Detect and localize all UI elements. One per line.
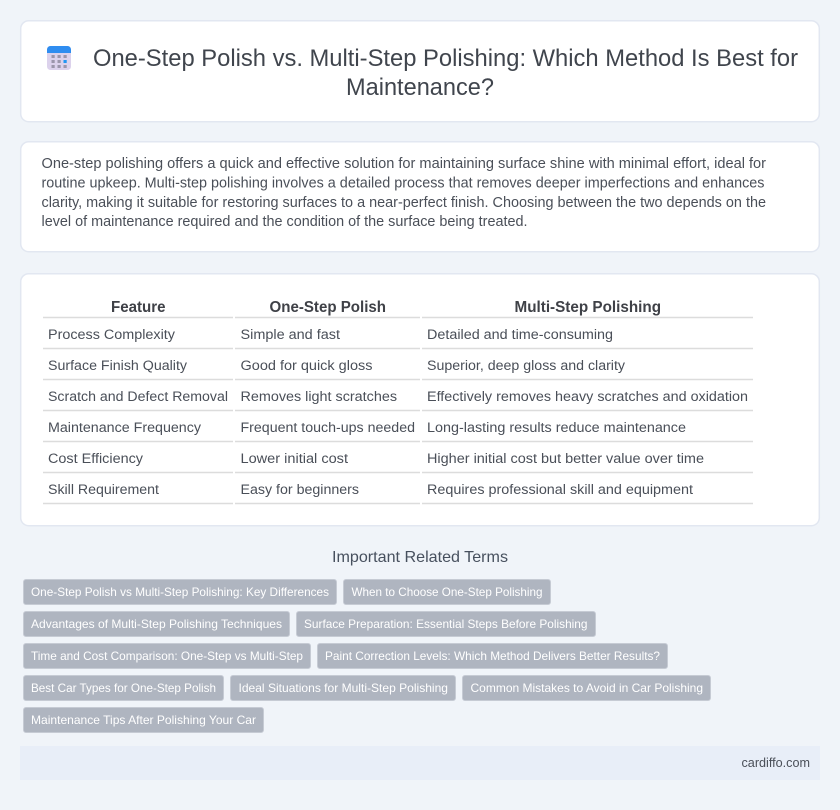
table row: surface finish quality xyxy=(48,358,626,374)
table row: process complexity: Simple and fast xyxy=(240,327,340,343)
table header: Multi-Step Polishing xyxy=(514,299,661,316)
tag xyxy=(462,676,710,700)
table row: maintenance frequency xyxy=(48,420,686,436)
title: One-Step Polish vs. Multi-Step Polishing: Which Method Is Best for xyxy=(93,45,798,72)
table header: Feature xyxy=(111,299,166,316)
tag: Surface Preparation: Essential Steps Before Polishing xyxy=(304,617,588,631)
tag: Common Mistakes to Avoid in Car Polishing xyxy=(470,681,703,695)
table row: surface finish quality: Surface Finish Quality xyxy=(48,358,188,374)
text block: introduction paragraph: One-step polishing offers a quick and effective solution for maintaining surface shine with minimal effort, ideal for xyxy=(42,156,766,172)
panel: introduction xyxy=(21,142,819,252)
tag xyxy=(24,708,264,732)
table row: surface finish quality: Good for quick gloss xyxy=(240,358,372,374)
table row: cost efficiency: Cost Efficiency xyxy=(48,451,144,467)
table row: scratch and defect removal xyxy=(48,389,748,405)
table row: maintenance frequency: Maintenance Frequency xyxy=(48,420,202,436)
table row: cost efficiency: Lower initial cost xyxy=(240,451,348,467)
title xyxy=(93,45,798,101)
tag xyxy=(230,676,456,700)
tag: Maintenance Tips After Polishing Your Car xyxy=(31,713,256,727)
tag: Advantages of Multi-Step Polishing Techniques xyxy=(31,617,282,631)
tag: When to Choose One-Step Polishing xyxy=(352,585,542,599)
heading: important related terms: Important Related Terms xyxy=(332,549,508,566)
text block: introduction paragraph xyxy=(42,156,766,230)
panel: comparison table xyxy=(21,274,819,526)
text block: introduction paragraph: level of maintenance required and the condition of the surface being treated. xyxy=(42,214,528,230)
table row: maintenance frequency: Frequent touch-ups needed xyxy=(240,420,415,436)
table row: skill requirement: Skill Requirement xyxy=(48,482,159,498)
table header xyxy=(111,299,661,316)
text block: introduction paragraph: routine upkeep. Multi-step polishing involves a detailed process that removes deeper imperfections and enhances xyxy=(42,176,764,192)
tag xyxy=(318,644,668,668)
table row: scratch and defect removal: Effectively removes heavy scratches and oxidation xyxy=(427,389,748,405)
panel: title card xyxy=(21,21,819,122)
table row: cost efficiency xyxy=(48,451,704,467)
tag xyxy=(24,676,224,700)
tag xyxy=(24,580,336,604)
table row: process complexity: Process Complexity xyxy=(48,327,176,343)
tag xyxy=(296,612,596,636)
title: Maintenance? xyxy=(346,74,494,101)
tag: Time and Cost Comparison: One-Step vs Multi-Step xyxy=(31,649,303,663)
tag xyxy=(24,644,310,668)
footer xyxy=(20,746,820,780)
table row: skill requirement xyxy=(48,482,693,498)
table row: scratch and defect removal: Scratch and Defect Removal xyxy=(48,389,228,405)
tag: One-Step Polish vs Multi-Step Polishing: Key Differences xyxy=(31,585,329,599)
tag: Paint Correction Levels: Which Method Delivers Better Results? xyxy=(325,649,660,663)
table row: scratch and defect removal: Removes light scratches xyxy=(240,389,397,405)
table header: One-Step Polish xyxy=(270,299,386,316)
table row: process complexity: Detailed and time-consuming xyxy=(427,327,613,343)
icon: calendar xyxy=(47,46,71,70)
text block: introduction paragraph: clarity, making it suitable for restoring surfaces to a near-perfect finish. Choosing between the two depends on the xyxy=(42,195,766,211)
tag: Best Car Types for One-Step Polish xyxy=(31,681,216,695)
tag list xyxy=(24,580,710,732)
table row: process complexity xyxy=(48,327,613,343)
tag: Ideal Situations for Multi-Step Polishing xyxy=(238,681,448,695)
tag xyxy=(344,580,550,604)
table row: cost efficiency: Higher initial cost but better value over time xyxy=(427,451,704,467)
table row: skill requirement: Requires professional skill and equipment xyxy=(427,482,693,498)
tag xyxy=(24,612,290,636)
table row: skill requirement: Easy for beginners xyxy=(240,482,359,498)
footer credit: cardiffo.com xyxy=(742,756,810,770)
table row: maintenance frequency: Long-lasting results reduce maintenance xyxy=(427,420,686,436)
table row: surface finish quality: Superior, deep gloss and clarity xyxy=(427,358,626,374)
